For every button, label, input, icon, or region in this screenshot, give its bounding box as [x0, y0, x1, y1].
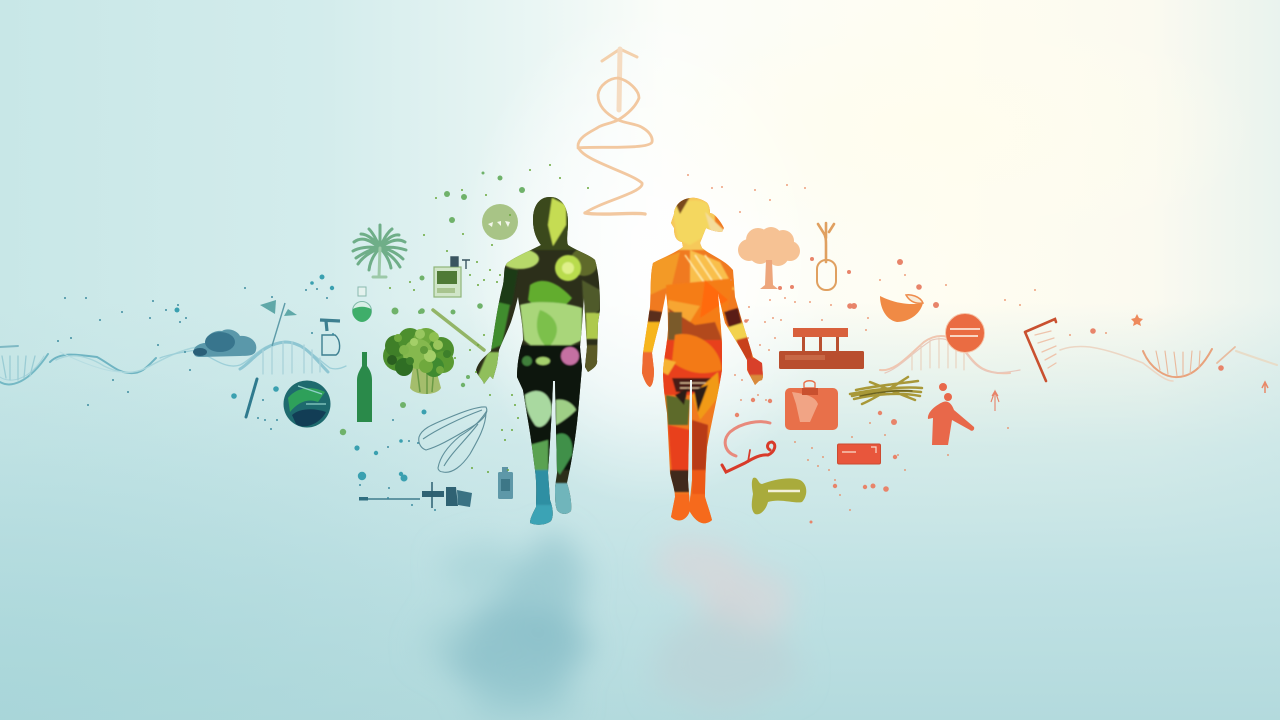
icon: circle sign	[946, 314, 984, 352]
icon: fork racket	[817, 223, 836, 290]
icon: stethoscope	[722, 422, 775, 472]
scatter: teal blobs	[174, 274, 426, 482]
teal smoke shadow under man	[415, 535, 590, 720]
scatter: green blobs	[340, 172, 525, 435]
scatter: blue specks	[58, 288, 435, 510]
figure: man collage silhouette	[476, 197, 600, 525]
icon: bottom instrument	[359, 482, 472, 508]
icon: flask	[352, 287, 372, 322]
icon: dried grass bundle	[850, 377, 922, 404]
icon: small arrow	[991, 391, 999, 411]
figure: woman collage silhouette	[642, 198, 763, 524]
scatter: green specks	[390, 165, 588, 472]
icon: red card	[838, 444, 880, 464]
icon: far right mini figure	[1262, 382, 1268, 393]
icon: small bottle	[498, 467, 513, 499]
icon: globe	[284, 380, 330, 428]
right far wave with arch	[1060, 346, 1277, 381]
scatter: orange blobs right	[735, 257, 1224, 524]
icon: lab machine	[434, 257, 470, 297]
icon: broccoli	[383, 328, 454, 394]
right DNA arch	[880, 336, 1020, 373]
icon: bench table	[779, 328, 864, 369]
top DNA ribbon	[578, 49, 652, 214]
icon: person walking	[928, 383, 974, 445]
icon: ladder rack	[1025, 319, 1056, 381]
icon: weather vane	[260, 300, 297, 346]
icon: olive clip	[752, 478, 806, 514]
icon: bowl	[880, 295, 923, 322]
icon: green bottle	[357, 352, 372, 422]
icon: moon planet	[482, 204, 518, 240]
icon: stick	[433, 310, 484, 350]
icon: suitcase	[785, 381, 838, 430]
icon: spray bottle	[320, 320, 340, 355]
left DNA wave	[0, 342, 346, 384]
scatter: orange specks right	[688, 175, 1221, 510]
icon: whisk tools outline	[419, 407, 487, 472]
icon: peach tree	[738, 227, 800, 289]
warm smoke shadow under woman	[657, 534, 800, 713]
icon: cloud	[193, 329, 256, 357]
icon: orange star	[1131, 314, 1143, 326]
icon: palm tree	[353, 225, 406, 277]
icon: pen	[246, 379, 257, 417]
